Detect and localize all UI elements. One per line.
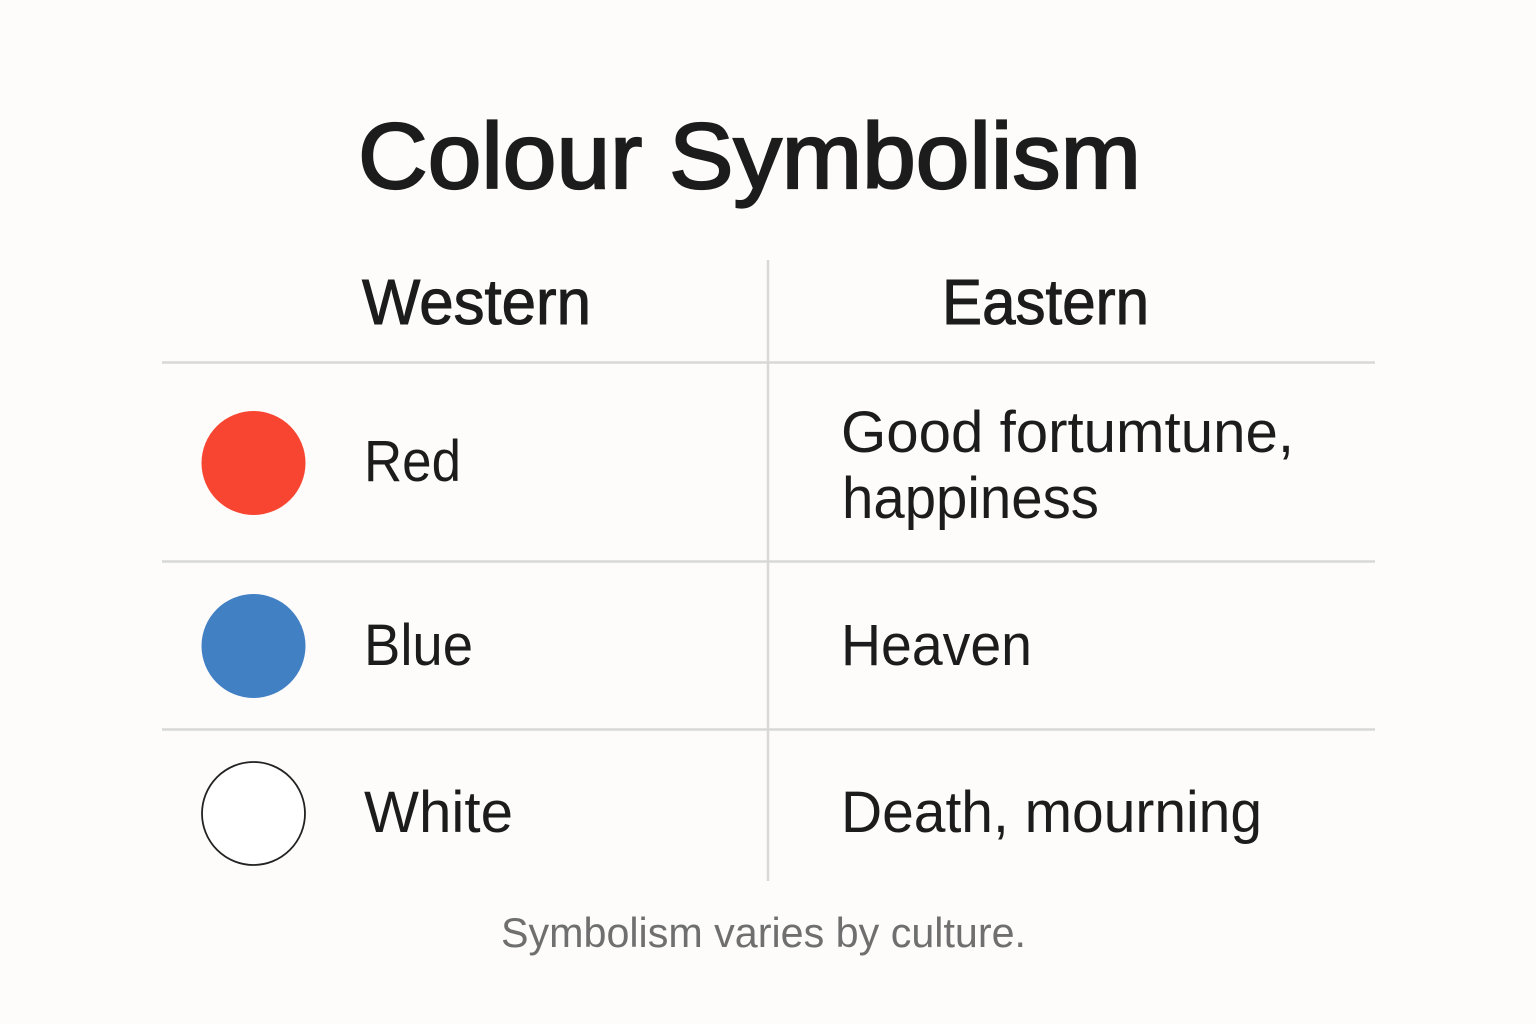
table grid (162, 260, 1375, 881)
meaning: Good fortumtune, happiness: Good fortumtune, (841, 400, 1294, 465)
title: Colour Symbolism (358, 104, 1141, 208)
meaning: Good fortumtune, happiness (841, 400, 1294, 531)
footnote: Symbolism varies by culture. (501, 909, 1026, 956)
meaning: Heaven: Heaven (841, 613, 1032, 678)
column heading: Eastern: Eastern (942, 266, 1149, 338)
icon: white circle (202, 762, 305, 865)
icon: red circle (202, 411, 306, 515)
meaning: Good fortumtune, happiness: happiness (842, 466, 1099, 531)
label: Red: Red (364, 429, 461, 494)
label: White: White (364, 780, 513, 845)
label: Blue: Blue (364, 613, 473, 678)
row: Blue (202, 594, 1032, 698)
row: Red (202, 400, 1294, 531)
icon: blue circle (202, 594, 306, 698)
row: White (202, 762, 1262, 865)
meaning: Death, mourning: Death, mourning (841, 780, 1262, 845)
column heading: Western: Western (362, 266, 591, 338)
